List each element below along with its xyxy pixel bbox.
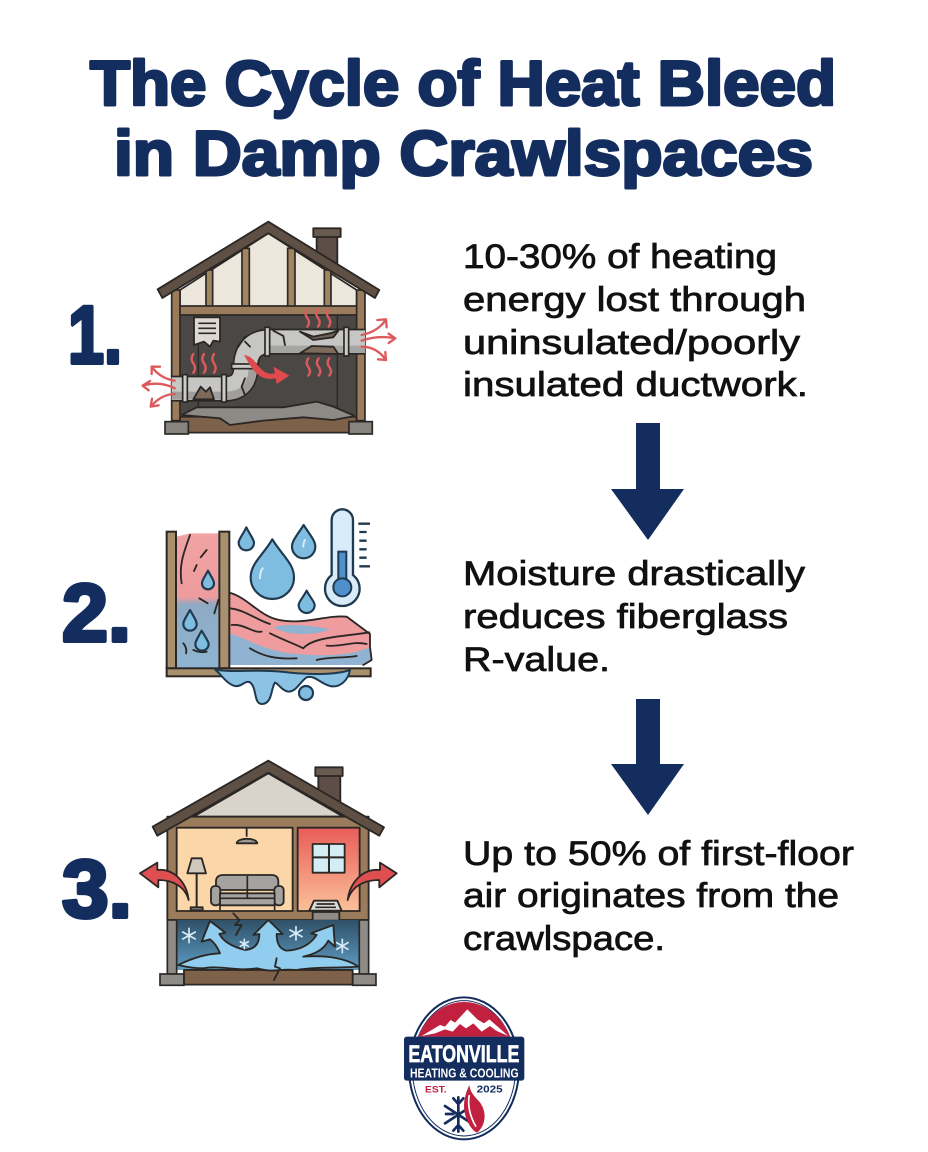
studs xyxy=(167,532,371,676)
floor vent xyxy=(309,901,342,921)
sofa xyxy=(211,875,284,910)
floor lamp xyxy=(187,858,206,910)
text block: step 2: R-value. xyxy=(463,641,610,679)
step number 3: 3. xyxy=(62,844,132,935)
text block: step 1: energy lost through xyxy=(463,281,806,319)
logo badge xyxy=(409,997,519,1139)
roof xyxy=(158,222,379,298)
ductwork xyxy=(172,327,365,402)
droplets xyxy=(183,525,315,700)
text block: step 2: reduces fiberglass xyxy=(463,598,788,636)
heat waves xyxy=(192,309,331,376)
roof xyxy=(153,761,384,836)
arrow: right heat escape xyxy=(348,863,397,900)
logo inner ring xyxy=(412,1001,516,1136)
chimney xyxy=(313,228,341,266)
wall posts xyxy=(172,290,365,421)
cavity studs xyxy=(198,315,337,410)
insulation debris xyxy=(182,402,355,425)
attic studs xyxy=(206,248,331,307)
icon: thermometer xyxy=(325,509,370,606)
floor soil xyxy=(180,417,357,433)
logo: Eatonville Heating & Cooling xyxy=(404,997,524,1139)
arrow: step 1 to 2 xyxy=(611,423,684,540)
text block: step 3: crawlspace. xyxy=(463,920,665,958)
text block: step 1: 10-30% of heating xyxy=(463,238,777,276)
text block: step 2 xyxy=(463,555,805,679)
logo banner xyxy=(404,1037,524,1081)
arrow: step 2 to 3 xyxy=(611,699,684,815)
logo mountains xyxy=(422,1009,508,1036)
step number 2: 2. xyxy=(62,568,131,659)
text block: step 2: Moisture drastically xyxy=(463,555,805,593)
crawlspace posts xyxy=(160,920,376,985)
water puddle xyxy=(215,669,350,704)
text block: step 1 xyxy=(463,238,808,404)
horizontal insulation xyxy=(229,593,372,665)
step number 1: 1. xyxy=(68,290,122,381)
window xyxy=(313,844,345,873)
title xyxy=(90,49,836,189)
soil xyxy=(184,970,353,985)
arrow: red airflow xyxy=(244,355,289,384)
ceiling lamp xyxy=(237,828,257,843)
living room xyxy=(177,828,293,911)
text block: step 1: insulated ductwork. xyxy=(463,366,808,404)
chimney xyxy=(315,767,343,805)
title: in Damp Crawlspaces xyxy=(114,119,813,189)
text block: step 3: air originates from the xyxy=(463,877,839,915)
vertical insulation xyxy=(177,533,218,668)
logo year: 2025 xyxy=(477,1085,503,1096)
attic xyxy=(193,773,343,817)
icon: house with stack effect xyxy=(140,761,397,985)
sheet lines xyxy=(198,323,216,333)
logo flame xyxy=(464,1085,485,1133)
wet patch xyxy=(229,633,372,665)
piers xyxy=(165,422,372,434)
house frame xyxy=(167,817,369,920)
crawlspace cavity xyxy=(177,920,359,970)
logo subtitle: HEATING & COOLING xyxy=(410,1066,519,1081)
warm room xyxy=(298,828,360,911)
insulation lines xyxy=(181,535,372,665)
text block: step 3: Up to 50% of first-floor xyxy=(463,835,854,873)
logo flame highlight xyxy=(469,1095,476,1127)
logo snowflake xyxy=(445,1097,472,1132)
cracks xyxy=(233,913,280,980)
torn insulation sheet xyxy=(194,317,220,347)
arrow: escaping air xyxy=(143,319,395,407)
logo est: EST. xyxy=(425,1085,447,1095)
text block: step 3 xyxy=(463,835,854,958)
logo name: EATONVILLE xyxy=(408,1041,519,1068)
icon: house with leaking ductwork xyxy=(143,222,395,434)
crawlspace cavity xyxy=(180,315,357,415)
arrow: left heat escape xyxy=(140,863,189,900)
attic xyxy=(180,233,357,307)
title: The Cycle of Heat Bleed xyxy=(90,49,836,119)
cold air mass and arrows xyxy=(178,920,358,971)
snowflakes xyxy=(183,927,348,953)
icon: wet insulation xyxy=(167,509,372,704)
text block: step 1: uninsulated/poorly xyxy=(463,324,800,362)
logo red sky xyxy=(418,1002,510,1037)
